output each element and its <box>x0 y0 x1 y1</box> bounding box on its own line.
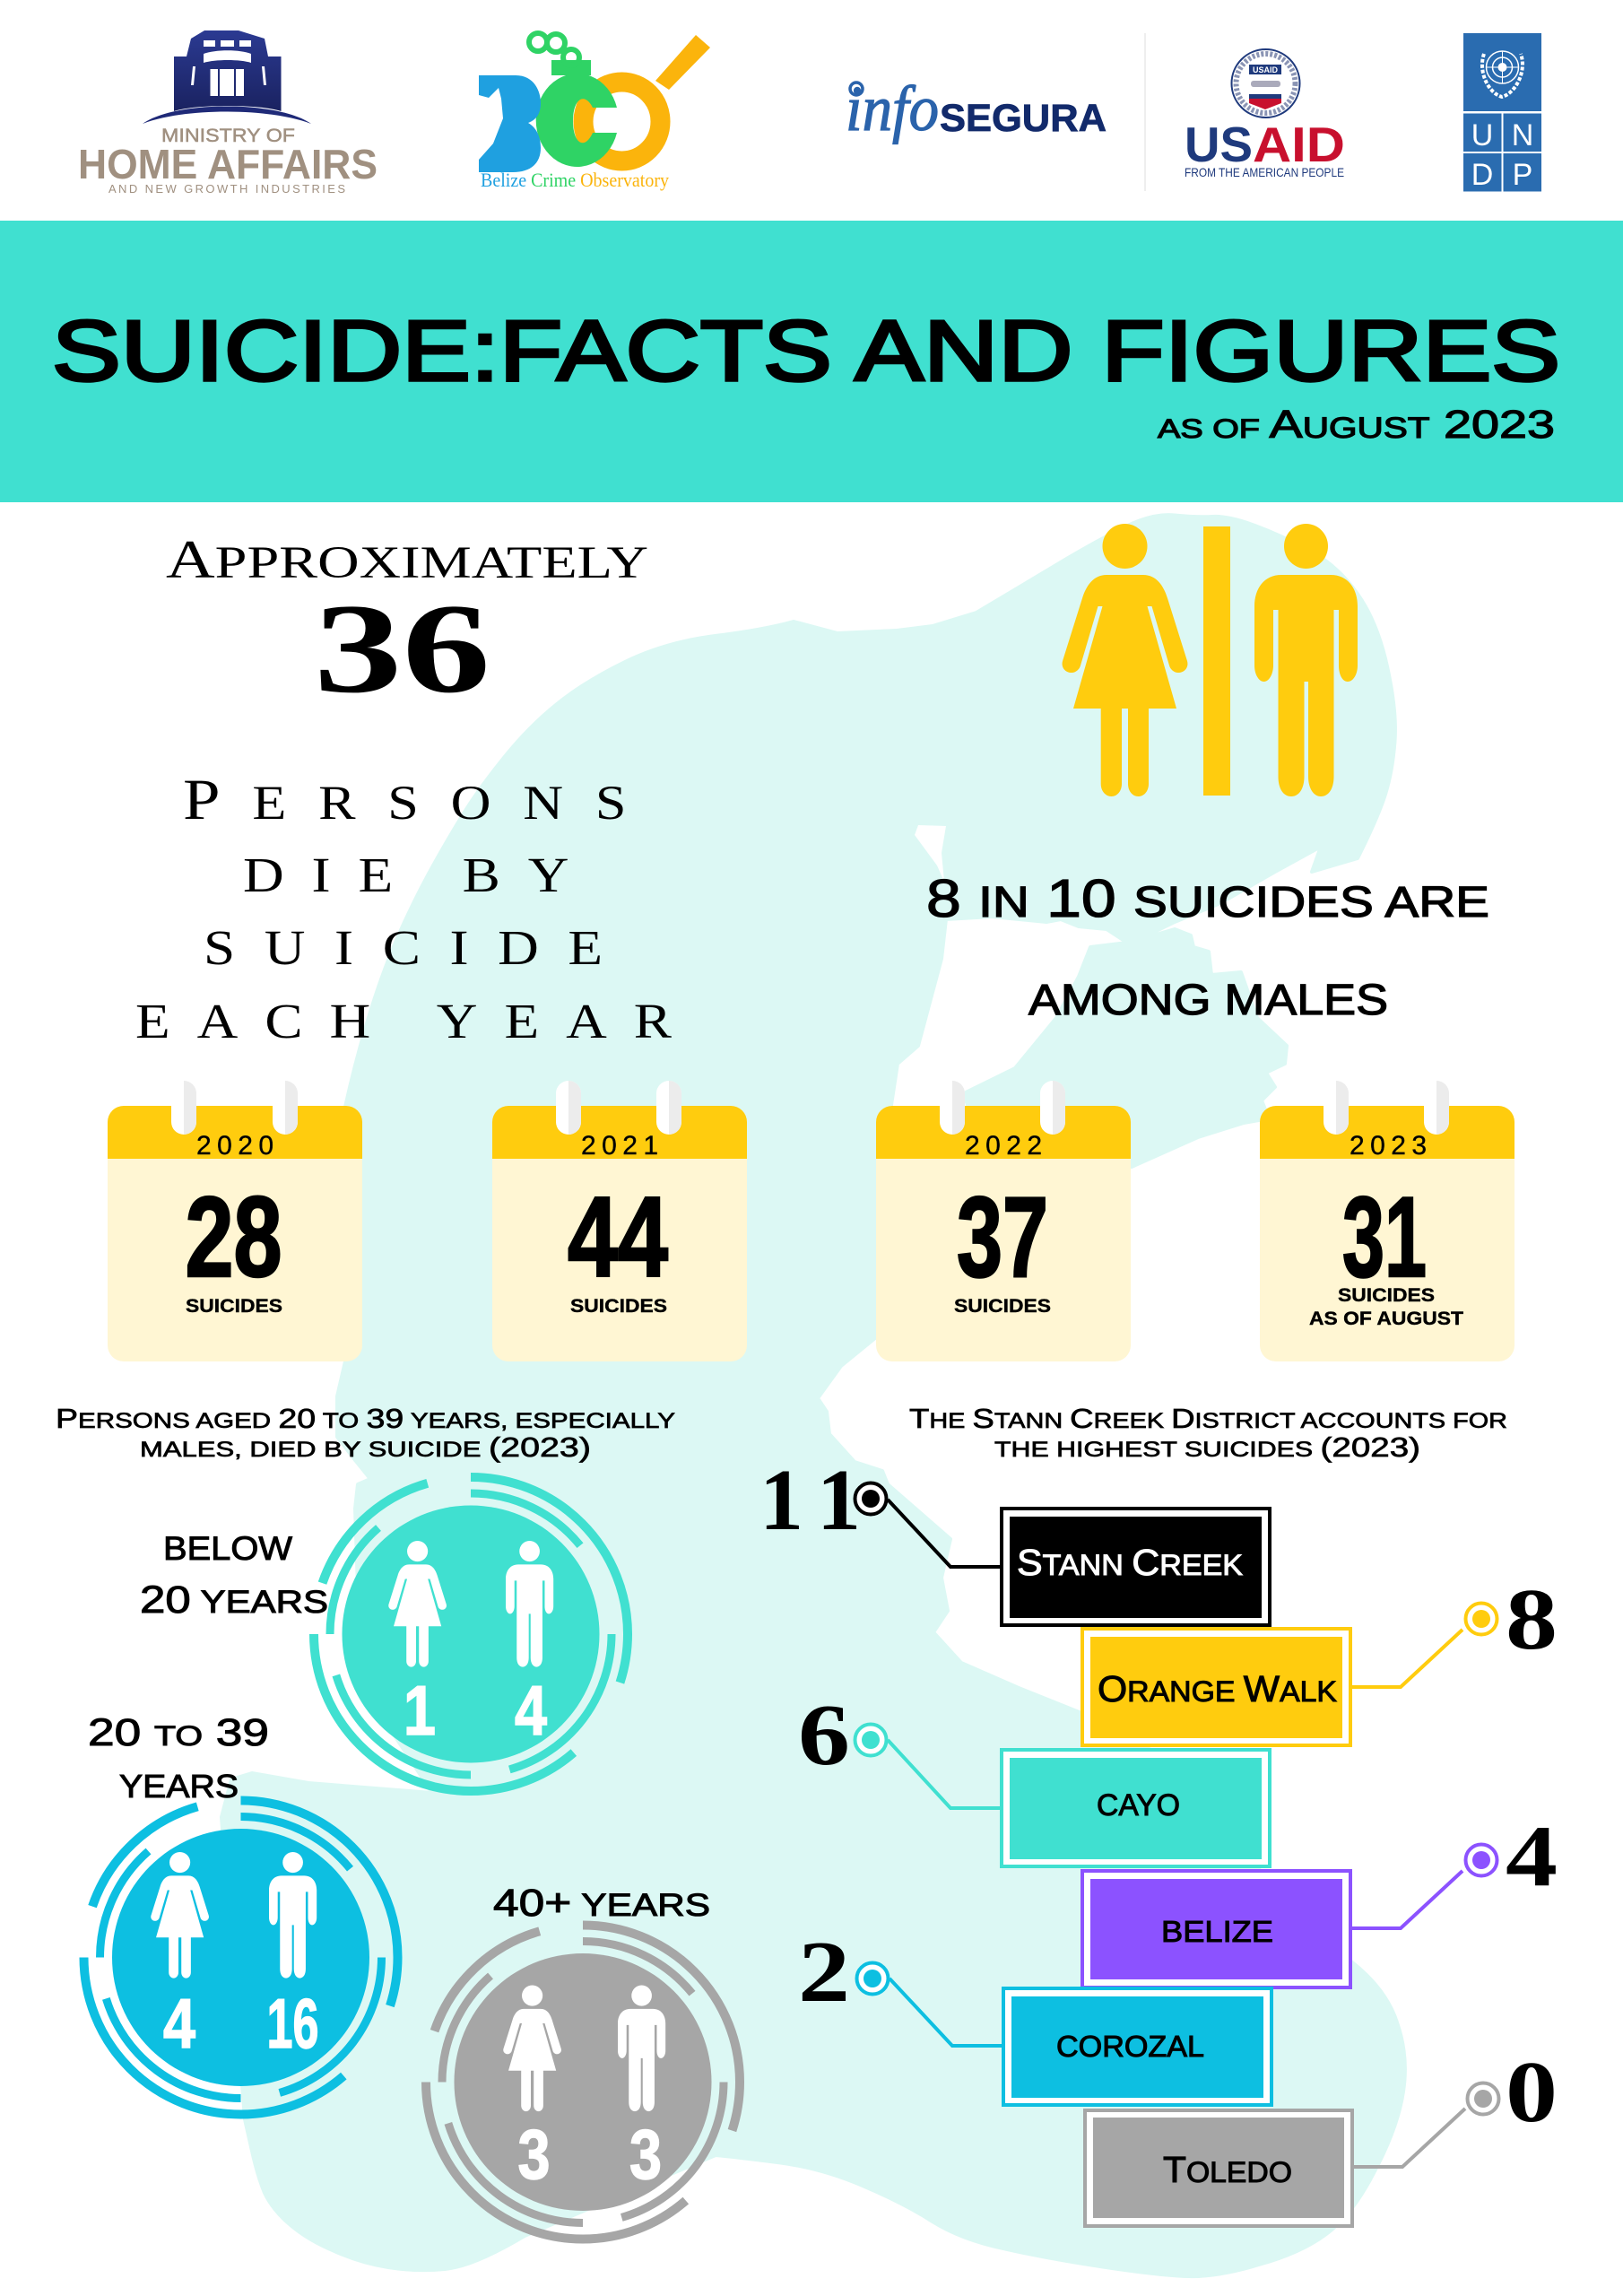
text block: approximately 36 persons die by suicide each year: P ERSONS <box>183 768 627 832</box>
district: Toledo: 0 <box>1506 2044 1558 2141</box>
age group: 40+ years <box>426 1883 740 2239</box>
logo: infoSEGURA: SEGURA <box>940 97 1107 140</box>
logo: Belize Crime Observatory: Belize Crime Observatory <box>481 169 669 191</box>
label: YEARS <box>119 1768 239 1805</box>
label: BELOW <box>163 1530 292 1567</box>
calendar: 2022 <box>876 1081 1131 1361</box>
district: Orange Walk: 8 <box>1506 1571 1558 1668</box>
logo: USAID: USAID <box>1253 65 1278 74</box>
district: Corozal <box>798 1924 1271 2105</box>
age group: below 20 years: 4 <box>515 1671 547 1750</box>
age group: below 20 years: 1 <box>404 1671 436 1750</box>
icon: female and male figures <box>1063 524 1358 796</box>
heading: persons aged 20 to 39 <box>56 1404 675 1463</box>
calendar: 2022: 37 <box>957 1173 1048 1300</box>
logo: infoSEGURA <box>846 73 1107 144</box>
background silhouette <box>221 515 1405 2276</box>
age group: 20 to 39 years: 16 <box>267 1984 319 2063</box>
text block: approximately 36 persons die by suicide each year: DIE BY <box>243 848 568 902</box>
text block: approximately 36 persons die by suicide each year: SUICIDE <box>204 920 603 975</box>
logo: UNDP: U <box>1471 118 1493 152</box>
logo: UNDP <box>1463 33 1541 192</box>
heading: persons aged 20 to 39: MALES, DIED BY SUICIDE (2023) <box>140 1432 591 1463</box>
district: Cayo: 6 <box>798 1687 850 1784</box>
district: Toledo <box>1085 2044 1558 2226</box>
label: 20 TO 39 <box>88 1712 269 1754</box>
text block: 8 in 10 suicides are among males <box>926 869 1489 1024</box>
logo: USAID: AID <box>1253 117 1345 172</box>
district: Corozal: COROZAL <box>1056 2031 1204 2064</box>
text block: approximately 36 persons die by suicide each year: EACH YEAR <box>135 994 673 1048</box>
logo: infoSEGURA: info <box>846 73 939 144</box>
heading: Stann Creek district <box>909 1404 1507 1463</box>
logo: UNDP: D <box>1471 158 1493 192</box>
district: Belize: BELIZE <box>1161 1916 1273 1949</box>
heading: persons aged 20 to 39: PERSONS AGED 20 TO 39 YEARS, ESPECIALLY <box>56 1404 675 1434</box>
district: Belize: 4 <box>1506 1808 1558 1905</box>
label: 20 YEARS <box>140 1579 328 1622</box>
age group: 40+ years: 3 <box>629 2115 662 2194</box>
text block: 8 in 10 suicides are among males: AMONG MALES <box>1028 977 1388 1024</box>
district: Cayo: CAYO <box>1097 1788 1180 1822</box>
calendar: 2020: SUICIDES <box>186 1296 282 1317</box>
title banner <box>0 221 1623 502</box>
calendar: 2023: 2023 <box>1350 1131 1427 1161</box>
logo: Ministry of Home Affairs: HOME AFFAIRS <box>78 141 378 187</box>
age group: 40+ years: 3 <box>518 2115 551 2194</box>
logo: UNDP: N <box>1512 118 1533 152</box>
calendar: 2021: 2021 <box>581 1131 658 1161</box>
calendar: 2020 <box>108 1081 362 1361</box>
district: Stann Creek <box>759 1452 1270 1625</box>
district: Orange Walk: ORANGE WALK <box>1098 1668 1337 1709</box>
calendar: 2022: SUICIDES <box>954 1296 1051 1317</box>
divider <box>1144 33 1146 191</box>
calendar: 2022: 2022 <box>965 1131 1042 1161</box>
age group: below 20 years <box>140 1477 628 1791</box>
district: Cayo <box>798 1687 1270 1866</box>
age group: 20 to 39 years <box>84 1712 398 2115</box>
subtitle: AS OF AUGUST 2023 <box>1158 403 1555 447</box>
logo: USAID: US <box>1185 117 1253 172</box>
calendar: 2023: 31 <box>1342 1173 1427 1300</box>
district: Orange Walk <box>1082 1571 1558 1745</box>
calendar: 2021: SUICIDES <box>570 1296 667 1317</box>
calendar: 2021 <box>492 1081 747 1361</box>
label: 40+ YEARS <box>493 1883 710 1925</box>
age group: 20 to 39 years: 4 <box>163 1984 195 2063</box>
logo: Belize Crime Observatory <box>479 33 710 191</box>
title: SUICIDE:FACTS AND FIGURES <box>52 303 1560 399</box>
calendar: 2023: SUICIDES <box>1338 1285 1435 1306</box>
logo: USAID: FROM THE AMERICAN PEOPLE <box>1185 165 1344 179</box>
heading: Stann Creek district: THE STANN CREEK DISTRICT ACCOUNTS FOR <box>909 1404 1507 1434</box>
calendar: 2020: 28 <box>185 1173 282 1300</box>
logo: Ministry of Home Affairs: AND NEW GROWTH INDUSTRIES <box>108 182 345 196</box>
logo: UNDP: P <box>1513 158 1532 192</box>
calendar: 2021: 44 <box>568 1173 668 1300</box>
district: Corozal: 2 <box>798 1924 850 2021</box>
label <box>140 1530 328 1622</box>
logo: USAID <box>1185 49 1345 179</box>
number: 36: 36 <box>314 578 490 719</box>
calendar: 2023: AS OF AUGUST <box>1309 1309 1463 1329</box>
district: Stann Creek: STANN CREEK <box>1017 1542 1243 1583</box>
logo: Ministry of Home Affairs <box>78 30 378 196</box>
calendar: 2020: 2020 <box>196 1131 273 1161</box>
text block: approximately 36 persons die by suicide each year <box>135 530 673 1048</box>
calendar: 2023 <box>1260 1081 1515 1361</box>
text block: 8 in 10 suicides are among males: 8 IN 10 SUICIDES ARE <box>926 869 1489 928</box>
heading: Stann Creek district: THE HIGHEST SUICIDES (2023) <box>994 1432 1420 1463</box>
district: Toledo: TOLEDO <box>1163 2149 1292 2190</box>
text block: approximately 36 persons die by suicide each year: APPROXIMATELY <box>166 530 648 589</box>
district: Stann Creek: 11 <box>759 1452 861 1549</box>
district: Belize <box>1082 1808 1558 1987</box>
logo: Ministry of Home Affairs: MINISTRY OF <box>161 126 295 146</box>
label <box>88 1712 269 1805</box>
